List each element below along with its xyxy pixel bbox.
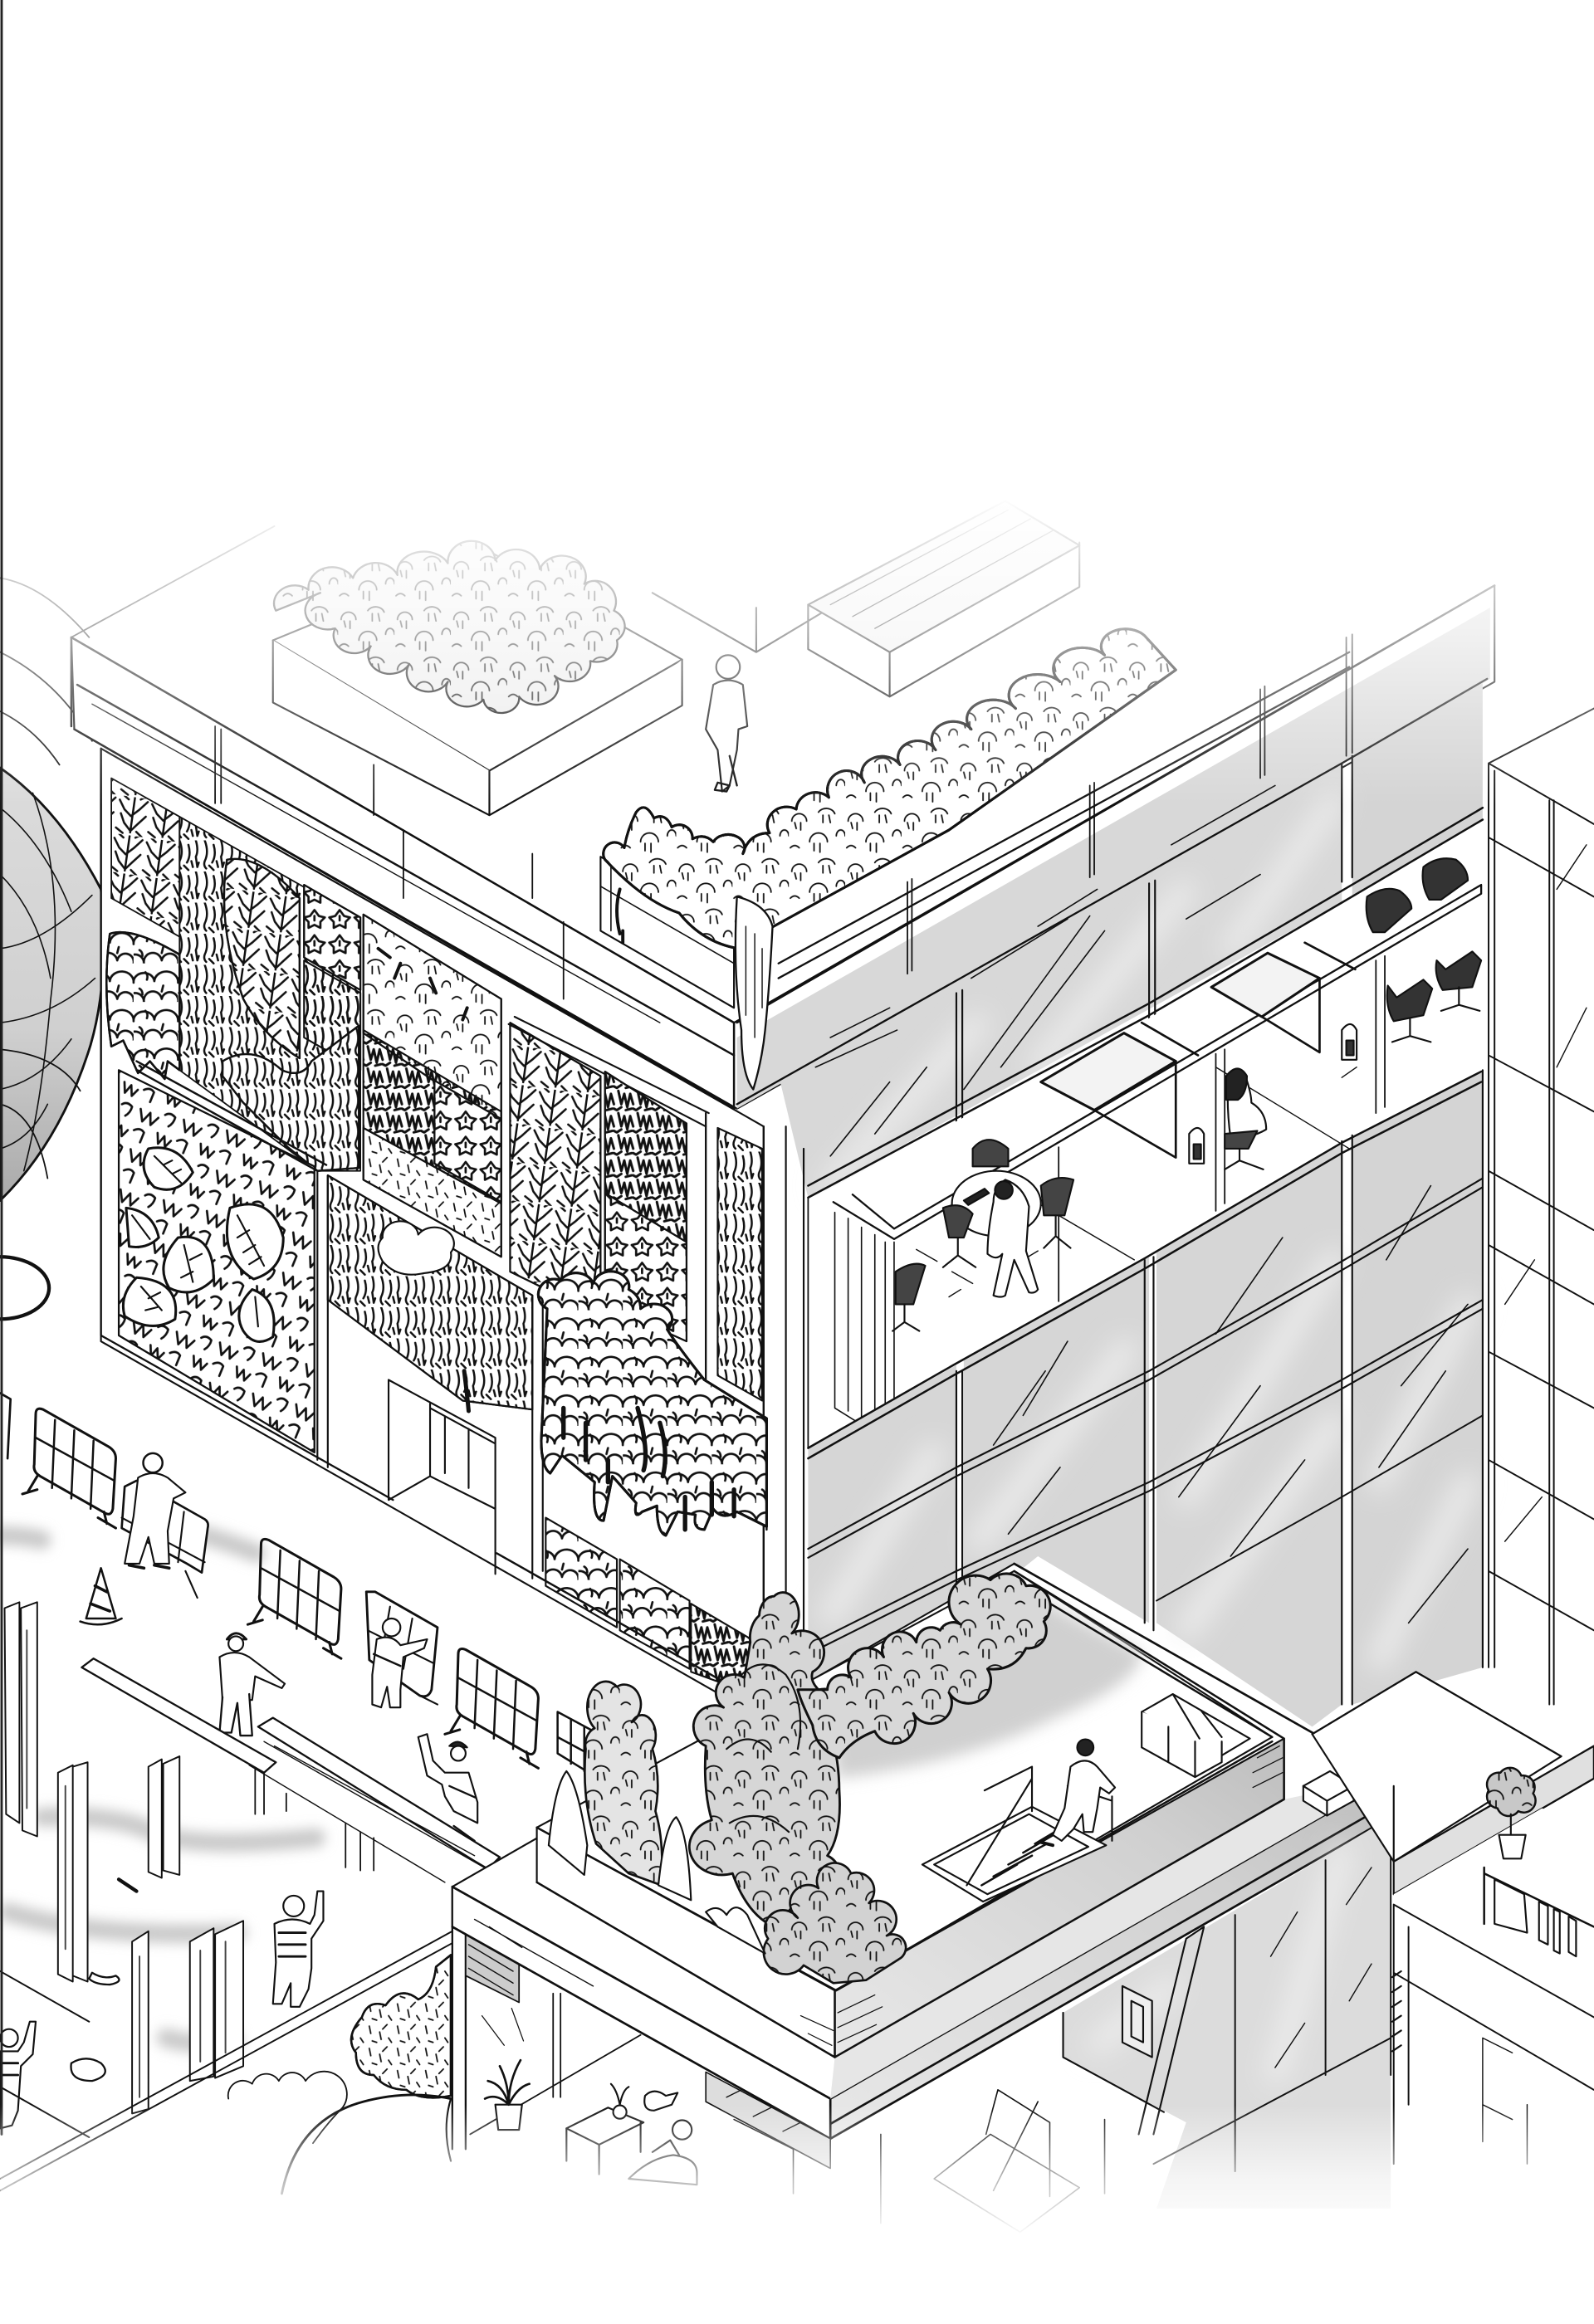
wall sconces bbox=[1189, 1024, 1357, 1164]
ground soft shadows bbox=[0, 1536, 316, 2043]
top fade to white bbox=[0, 0, 1594, 830]
shrub at terrace front bbox=[706, 1863, 906, 1983]
worker waving on ground bbox=[273, 1892, 323, 2007]
cypress shrubs on terrace bbox=[549, 1682, 691, 1900]
lower-left floor edge bbox=[0, 1931, 452, 2190]
mid dense panel bbox=[364, 1030, 501, 1204]
fern panel upper left bbox=[111, 779, 179, 937]
lower glass facade bbox=[786, 1070, 1483, 1726]
bottom white area bbox=[0, 2238, 1594, 2324]
flower block bbox=[434, 1081, 501, 1202]
traffic cone bbox=[81, 1568, 122, 1624]
terrace slab bbox=[452, 1564, 1391, 2168]
fern grass block bbox=[304, 960, 360, 1070]
fern overlay bbox=[224, 859, 300, 1058]
worker lifting barrier bbox=[366, 1592, 438, 1707]
person at desk bbox=[1228, 1076, 1266, 1138]
mesh chairs bbox=[896, 1140, 1073, 1304]
wood planks bbox=[81, 1658, 500, 1882]
leaf block bbox=[304, 885, 360, 990]
potted plant bbox=[485, 2060, 530, 2130]
worker waving near planks bbox=[418, 1734, 477, 1841]
hanging grass mass bbox=[222, 1026, 359, 1171]
fern panel right bbox=[510, 1023, 600, 1316]
glass highlights bbox=[830, 800, 1334, 1186]
lower glass volume under terrace bbox=[734, 1777, 1391, 2232]
floor lines bbox=[917, 1067, 1357, 1296]
curtain bbox=[835, 1213, 894, 1445]
office interior bbox=[808, 823, 1483, 1448]
left wall with vertical garden bbox=[101, 749, 766, 1719]
right lower roof with tree and laundry bbox=[1313, 1672, 1594, 2164]
lower interior room bbox=[452, 1887, 641, 2149]
ledge over right panels bbox=[509, 1017, 709, 1126]
sphere dome at left bbox=[0, 578, 104, 1200]
rooftop planter with bushes bbox=[273, 541, 682, 815]
black chairs bbox=[1367, 858, 1468, 932]
left page edge line bbox=[1, 0, 2, 2134]
roof terrace floor and parapet bbox=[537, 1571, 1391, 2099]
worker with helmet pointing bbox=[219, 1633, 285, 1736]
grass panel with ferns bbox=[179, 817, 360, 1171]
right tower bbox=[1489, 709, 1594, 1705]
laundry line bbox=[1484, 1868, 1594, 1956]
bush band bottom bbox=[545, 1518, 617, 1628]
doorway bbox=[389, 1379, 496, 1574]
lower-left bushes bbox=[228, 1955, 451, 2194]
desk with vase and cat bbox=[566, 2084, 677, 2175]
person climbing stairs bbox=[1041, 1740, 1115, 1845]
potted tree bbox=[1487, 1768, 1536, 1858]
bush block on grass bbox=[106, 932, 179, 1079]
monstera panel bbox=[119, 1070, 315, 1452]
main slab and parapet bbox=[71, 526, 1494, 1109]
bottom fade to white bbox=[0, 2105, 1594, 2238]
round table bbox=[952, 1171, 1041, 1236]
moss panel centre bbox=[328, 1175, 532, 1409]
walls under panels bbox=[317, 1171, 543, 1579]
monstera leaves bbox=[123, 1148, 283, 1341]
worker at left edge bbox=[0, 2022, 36, 2128]
person reclining bbox=[628, 2120, 697, 2185]
stacked boxes on terrace bbox=[1142, 1694, 1250, 1777]
scattered narrow panel bbox=[717, 1128, 762, 1401]
planter corner with hanging plants bbox=[600, 629, 1176, 1089]
worker carrying barrier bbox=[122, 1453, 208, 1598]
steel posts in ground bbox=[5, 1602, 243, 2113]
ceiling tiles bbox=[1041, 953, 1319, 1111]
small box on slab bbox=[1303, 1771, 1354, 1816]
large cypress bbox=[689, 1593, 849, 1926]
walking person bbox=[987, 1179, 1038, 1296]
meadow strip bbox=[364, 1128, 501, 1257]
shrub row on terrace bbox=[798, 1574, 1050, 1758]
upper dense panel bbox=[364, 915, 501, 1126]
rooftop stair opening bbox=[922, 1767, 1112, 1902]
right facade upper glass band bbox=[737, 585, 1494, 1198]
person walking on roof bbox=[706, 655, 747, 792]
rooftop vent boxes bbox=[653, 501, 1079, 696]
ring on the ground at left bbox=[0, 1257, 49, 1319]
hanging moss panel bbox=[538, 1272, 766, 1536]
barriers on street bbox=[0, 1394, 596, 1777]
mixed panel right bbox=[605, 1072, 687, 1341]
glass highlights bbox=[830, 1260, 1468, 1660]
